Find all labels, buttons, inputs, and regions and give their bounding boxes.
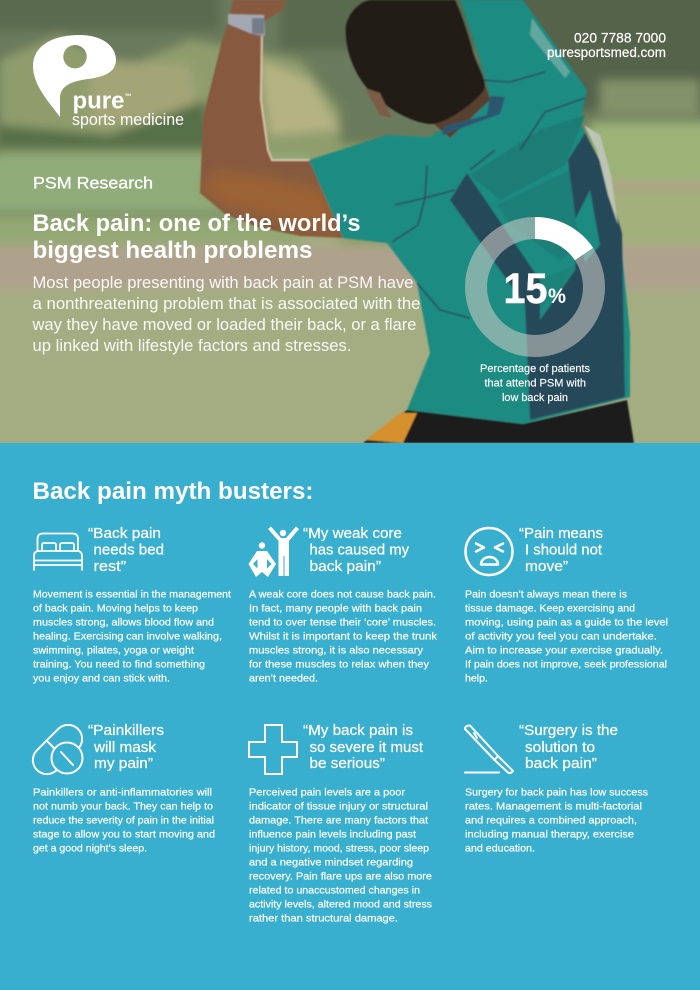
panel: myth 2 weak core <box>248 525 438 684</box>
section label: PSM Research: PSM Research <box>33 174 153 192</box>
quote <box>88 722 164 772</box>
body text: swimming, pilates, yoga or weight <box>33 646 194 656</box>
body text: Aim to increase your exercise gradually. <box>465 646 663 656</box>
body text: including manual therapy, exercise <box>465 830 634 840</box>
quote: “Back pain <box>88 525 161 542</box>
quote: rest” <box>94 558 126 575</box>
body text: related to unaccustomed changes in <box>249 886 420 896</box>
body text: Movement is essential in the management <box>33 590 231 600</box>
quote: back pain” <box>310 558 381 575</box>
body text: and a negative mindset regarding <box>249 858 413 868</box>
body text: rather than structural damage. <box>249 914 398 924</box>
body text: you enjoy and can stick with. <box>33 674 170 684</box>
quote <box>303 525 409 575</box>
title <box>32 210 360 264</box>
contact details: 020 7788 7000 <box>574 31 666 46</box>
body text: muscles strong, allows blood flow and <box>33 618 214 628</box>
body text: indicator of tissue injury or structural <box>249 802 428 812</box>
body text: of back pain. Moving helps to keep <box>33 604 198 614</box>
waist <box>363 400 634 443</box>
body text: get a good night’s sleep. <box>33 844 147 854</box>
body text: for these muscles to relax when they <box>249 660 430 670</box>
title: Back pain: one of the world’s <box>32 210 360 237</box>
body text: reduce the severity of pain in the initial <box>33 816 214 826</box>
quote: back pain” <box>525 755 597 772</box>
icon: scalpel <box>465 726 513 773</box>
logo: pure sports medicine: pure <box>72 88 124 114</box>
body text: moving, using pain as a guide to the level <box>465 618 668 628</box>
body text <box>249 788 432 924</box>
quote: I should not <box>525 542 603 558</box>
body text: and requires a combined approach, <box>465 816 637 826</box>
body text: tend to over tense their ‘core’ muscles. <box>249 618 436 628</box>
head <box>346 0 485 124</box>
quote: move” <box>525 558 568 575</box>
body text: Painkillers or anti-inflammatories will <box>33 788 212 798</box>
intro paragraph <box>32 273 421 355</box>
logo: pure sports medicine: ™ <box>124 94 132 100</box>
body text: and education. <box>465 844 535 854</box>
quote <box>88 525 164 575</box>
title: biggest health problems <box>32 237 312 264</box>
body text: help. <box>465 674 488 684</box>
heading: myth busters: Back pain myth busters: <box>32 478 314 505</box>
quote <box>519 525 603 575</box>
body text: In fact, many people with back pain <box>249 604 422 614</box>
body text <box>465 590 668 684</box>
panel: myth 6 surgery <box>465 722 648 854</box>
intro paragraph: a nonthreatening problem that is associated with the <box>32 294 420 313</box>
quote: be serious” <box>310 755 385 772</box>
body text: of activity you feel you can undertake. <box>465 632 657 642</box>
body text: not numb your back. They can help to <box>33 802 213 812</box>
body text: injury history, mood, stress, poor sleep <box>249 844 429 854</box>
quote: solution to <box>525 739 595 756</box>
icon: medical cross <box>249 725 297 774</box>
icon: capsule and tablet <box>27 719 88 780</box>
body text: muscles strong, it is also necessary <box>249 646 424 656</box>
quote <box>519 722 618 772</box>
body text <box>33 590 231 684</box>
body text: Whilst it is important to keep the trunk <box>249 632 438 642</box>
quote: “Pain means <box>519 525 603 542</box>
panel: myth 1 bed rest <box>33 525 231 684</box>
quote: “Surgery is the <box>519 722 618 739</box>
donut chart: 15 percent: % <box>548 285 566 308</box>
body text: Surgery for back pain has low success <box>465 788 648 798</box>
contact details: puresportsmed.com <box>547 45 666 60</box>
icon: pained face <box>466 528 512 575</box>
intro paragraph: way they have moved or loaded their back, or a flare <box>32 315 417 334</box>
donut caption: low back pain <box>502 392 568 404</box>
donut caption: Percentage of patients <box>480 363 590 375</box>
quote: needs bed <box>94 542 164 558</box>
shirt <box>309 0 630 424</box>
body text: Perceived pain levels are a poor <box>249 788 406 798</box>
body text: Pain doesn’t always mean there is <box>465 590 627 600</box>
donut chart: 15 percent: 15 <box>504 265 548 313</box>
body text: training. You need to find something <box>33 660 205 670</box>
neck and collar <box>434 86 490 138</box>
intro paragraph: Most people presenting with back pain at PSM have <box>32 273 414 292</box>
contact details <box>547 31 666 60</box>
body text: A weak core does not cause back pain. <box>249 590 436 600</box>
quote: “My back pain is <box>303 722 413 739</box>
logo: pure sports medicine <box>33 35 184 129</box>
body text <box>249 590 438 684</box>
arm skin <box>200 0 345 238</box>
body text: stage to allow you to start moving and <box>33 830 215 840</box>
panel: myth 4 painkillers <box>27 719 215 854</box>
body text: If pain does not improve, seek professional <box>465 660 667 670</box>
donut caption <box>480 363 590 404</box>
body text: activity levels, altered mood and stress <box>249 900 432 910</box>
panel: myth 3 pain means stop <box>465 525 668 684</box>
quote: will mask <box>93 739 157 756</box>
quote: so severe it must <box>310 739 424 756</box>
panel: blue myth-buster background <box>0 443 700 990</box>
quote: “My weak core <box>303 525 402 542</box>
quote <box>303 722 424 772</box>
panel: myth 5 severe pain <box>249 722 432 924</box>
body text: recovery. Pain flare ups are also more <box>249 872 432 882</box>
panel: hero photo of man stretching in a park <box>0 0 700 460</box>
body text: damage. There are many factors that <box>249 816 428 826</box>
body text: rates. Management is multi-factorial <box>465 802 642 812</box>
body text <box>33 788 215 854</box>
icon: bed <box>34 534 82 570</box>
logo: pure sports medicine: sports medicine <box>72 110 184 129</box>
quote: my pain” <box>94 755 153 772</box>
body text: healing. Exercising can involve walking, <box>33 632 222 642</box>
icon: two exercising figures <box>248 526 299 577</box>
body text: tissue damage. Keep exercising and <box>465 604 635 614</box>
quote: “Painkillers <box>88 722 164 739</box>
donut chart: 15 percent <box>476 228 594 346</box>
donut caption: that attend PSM with <box>484 378 586 390</box>
body text: aren’t needed. <box>249 674 318 684</box>
body text: influence pain levels including past <box>249 830 416 840</box>
intro paragraph: up linked with lifestyle factors and stresses. <box>32 336 352 355</box>
quote: has caused my <box>310 542 409 558</box>
body text <box>465 788 648 854</box>
